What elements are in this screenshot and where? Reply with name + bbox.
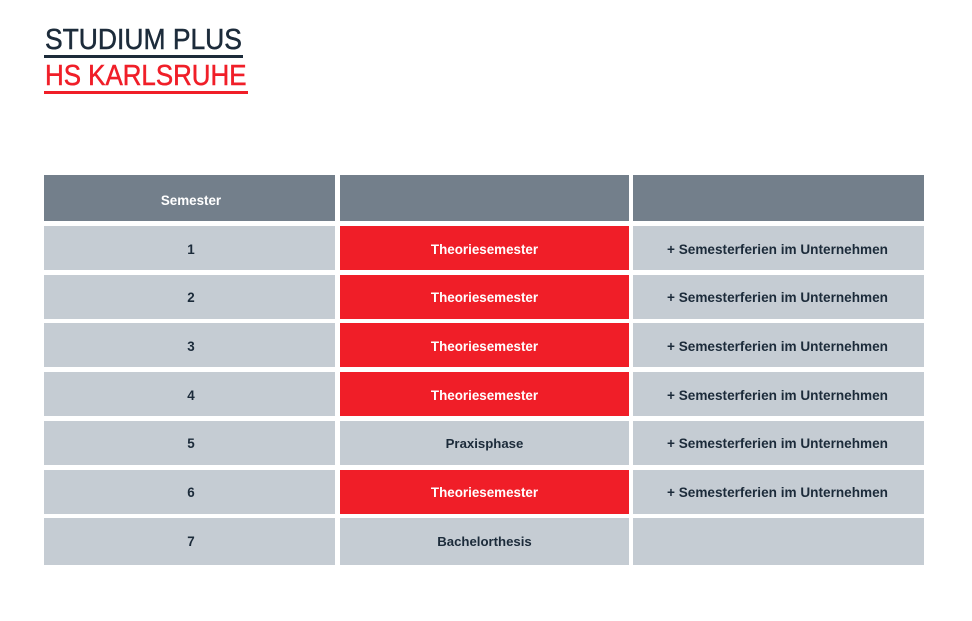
row 3: semester: 3: [187, 338, 195, 354]
row 6: phase: Theoriesemester: [431, 484, 538, 500]
row 5: phase: Praxisphase: [446, 436, 523, 450]
row 7: empty cell: [633, 518, 924, 565]
row 6: phase: [340, 470, 629, 514]
row 4: semester: 4: [187, 388, 195, 402]
row 4: break: + Semesterferien im Unternehmen: [667, 388, 888, 402]
table: [44, 175, 924, 565]
row 2: phase: Theoriesemester: [431, 290, 538, 304]
row 4: phase: Theoriesemester: [431, 388, 538, 402]
row 7: phase: Bachelorthesis: [437, 534, 532, 549]
row 2: semester: 2: [187, 290, 195, 304]
row 2: phase: [340, 275, 629, 319]
row 1: break: [633, 226, 924, 270]
row 6: break: [633, 470, 924, 514]
row 4: break: [633, 372, 924, 416]
row 2: semester: [44, 275, 335, 319]
row 6: break: + Semesterferien im Unternehmen: [667, 484, 888, 500]
row 3: break: [633, 323, 924, 367]
row 6: semester: [44, 470, 335, 514]
row 1: break: + Semesterferien im Unternehmen: [667, 242, 888, 256]
header cell: empty: [340, 175, 629, 221]
row 3: semester: [44, 323, 335, 367]
row 1: phase: Theoriesemester: [431, 242, 538, 256]
row 3: phase: Theoriesemester: [431, 338, 538, 354]
row 7: phase: [340, 518, 629, 565]
row 3: phase: [340, 323, 629, 367]
row 2: break: [633, 275, 924, 319]
header cell: empty: [633, 175, 924, 221]
row 6: semester: 6: [187, 484, 195, 500]
header cell: Semester: Semester: [161, 192, 221, 208]
row 5: phase: [340, 421, 629, 465]
row 5: semester: 5: [187, 436, 195, 450]
row 4: semester: [44, 372, 335, 416]
row 5: break: + Semesterferien im Unternehmen: [667, 436, 888, 450]
row 5: break: [633, 421, 924, 465]
row 1: phase: [340, 226, 629, 270]
title: HS Karlsruhe: HS KARLSRUHE: [45, 60, 246, 92]
row 4: phase: [340, 372, 629, 416]
row 7: semester: [44, 518, 335, 565]
title: Studium Plus: STUDIUM PLUS: [45, 24, 242, 56]
row 3: break: + Semesterferien im Unternehmen: [667, 338, 888, 354]
row 5: semester: [44, 421, 335, 465]
row 1: semester: [44, 226, 335, 270]
row 1: semester: 1: [187, 242, 195, 256]
row 2: break: + Semesterferien im Unternehmen: [667, 290, 888, 304]
header cell: Semester: [44, 175, 335, 221]
row 7: semester: 7: [187, 534, 195, 549]
